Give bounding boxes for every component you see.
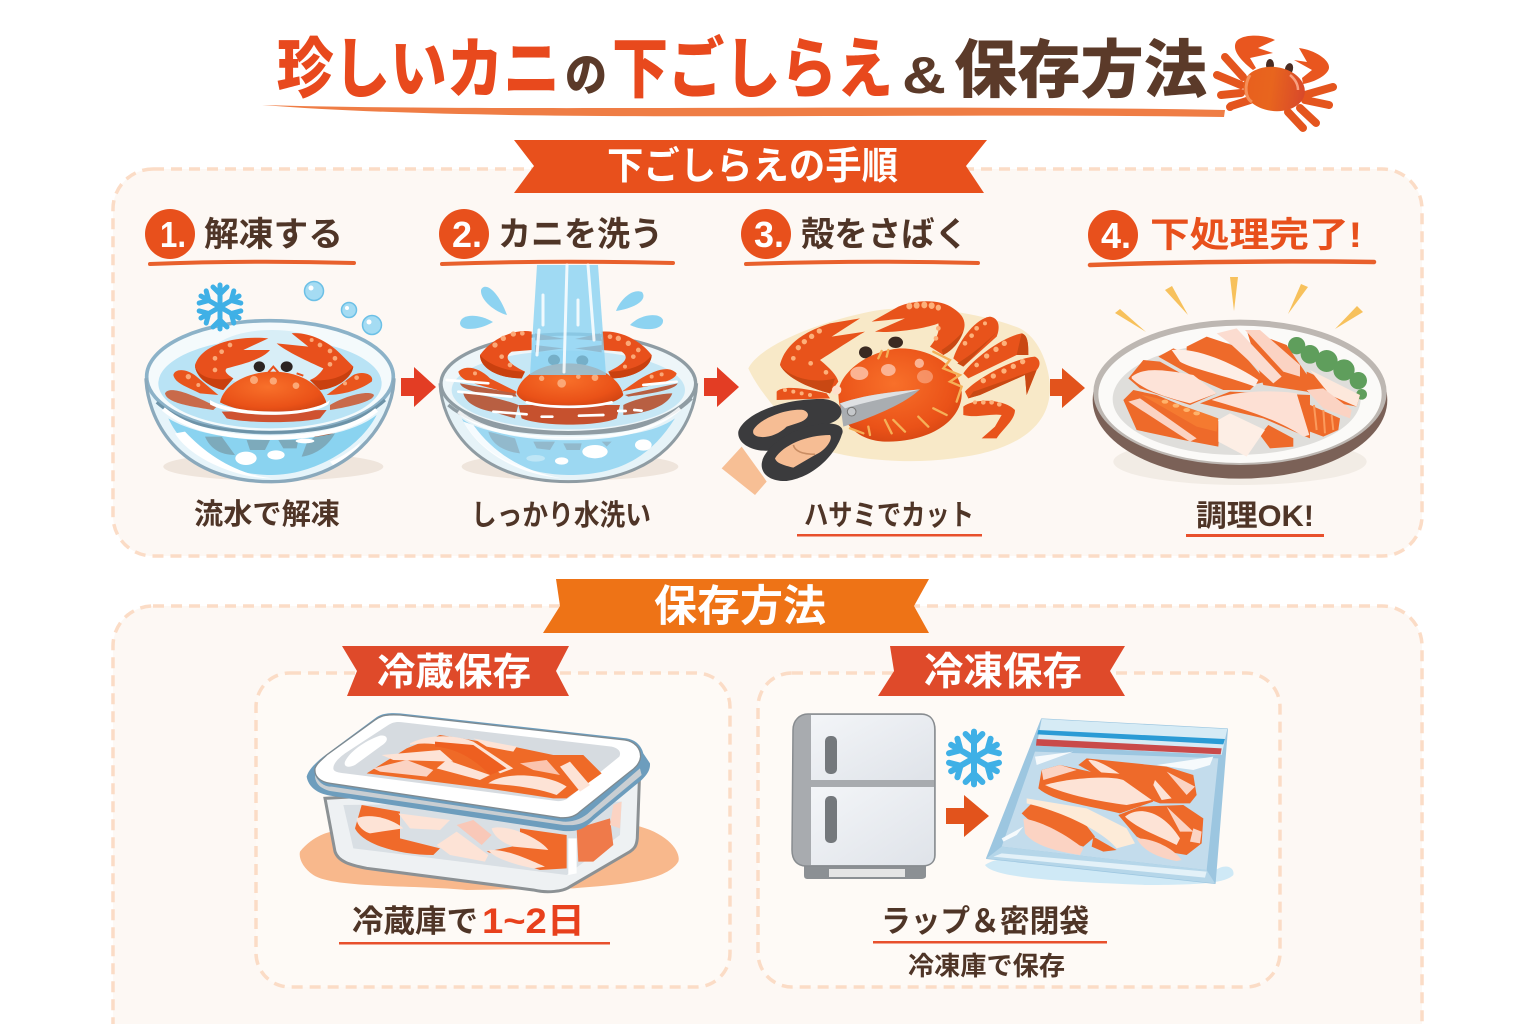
section banner: preparation steps bbox=[514, 140, 987, 193]
icon: snowflake freezer bbox=[947, 732, 1001, 784]
step 4 heading: 下処理完了! bbox=[1150, 216, 1362, 255]
step 3 heading: 殻をさばく bbox=[801, 216, 968, 254]
step 3 heading bbox=[741, 209, 978, 264]
banner: frozen storage bbox=[878, 646, 1125, 696]
step 3 heading: 3. bbox=[754, 214, 784, 255]
section banner: preparation steps: 下ごしらえの手順 bbox=[607, 146, 898, 188]
caption: refrigerator 1 to 2 days: 冷蔵庫で bbox=[352, 904, 478, 939]
banner: refrigerated storage bbox=[342, 646, 569, 696]
caption: refrigerator 1 to 2 days: 1~2日 bbox=[482, 902, 585, 941]
icon: sparkle rays bbox=[1115, 277, 1363, 332]
caption: refrigerator 1 to 2 days bbox=[339, 902, 610, 944]
icon: snowflake bbox=[197, 285, 243, 329]
icon: refrigerator bbox=[792, 714, 935, 879]
illustration: crab cut with scissors bbox=[722, 301, 1050, 495]
banner: frozen storage: 冷凍保存 bbox=[924, 651, 1082, 694]
illustration: freezer bag with crab bbox=[985, 719, 1234, 885]
arrow: step 1 to step 2 bbox=[401, 367, 436, 407]
caption: wrap and sealed bag: ラップ＆密閉袋 bbox=[881, 904, 1089, 939]
illustration: plate of prepared crab bbox=[1093, 320, 1387, 485]
caption: step 3: ハサミでカット bbox=[804, 500, 974, 532]
step 4 heading bbox=[1088, 210, 1374, 265]
caption: keep in freezer: 冷凍庫で保存 bbox=[908, 951, 1065, 981]
icon: title crab bbox=[1217, 36, 1333, 128]
panel: frozen storage bbox=[758, 673, 1280, 987]
panel: storage methods bbox=[113, 606, 1422, 1024]
illustration: crab thawing in bowl bbox=[146, 321, 394, 482]
arrow: step 3 to step 4 bbox=[1050, 368, 1085, 408]
section banner: storage methods bbox=[543, 579, 929, 633]
arrow: freezer to bag bbox=[946, 795, 989, 837]
title bbox=[277, 32, 1207, 106]
section banner: storage methods: 保存方法 bbox=[654, 583, 826, 631]
caption: step 4: 調理OK! bbox=[1196, 500, 1314, 533]
illustration: crab washed in bowl bbox=[440, 331, 697, 482]
step 1 heading bbox=[145, 209, 354, 264]
panel: refrigerated storage bbox=[256, 673, 730, 987]
arrow: step 2 to step 3 bbox=[704, 367, 739, 407]
illustration: refrigerated container bbox=[300, 713, 679, 892]
title: 下ごしらえ bbox=[612, 32, 893, 106]
caption: step 2: しっかり水洗い bbox=[471, 499, 651, 532]
step 2 heading: カニを洗う bbox=[498, 216, 663, 254]
title: 保存方法 bbox=[954, 36, 1207, 106]
step 4 heading: 4. bbox=[1101, 215, 1131, 256]
title: & bbox=[902, 47, 946, 105]
icon: water stream bbox=[530, 265, 606, 375]
step 1 heading: 1. bbox=[160, 214, 186, 255]
icon: water bubbles bbox=[304, 282, 382, 334]
title: の bbox=[565, 49, 607, 101]
banner: refrigerated storage: 冷蔵保存 bbox=[377, 652, 531, 694]
step 2 heading: 2. bbox=[452, 214, 482, 255]
step 2 heading bbox=[439, 209, 673, 264]
icon: water splashes bbox=[460, 287, 663, 329]
title: 珍しいカニ bbox=[277, 32, 560, 106]
title underline swoosh bbox=[262, 105, 1225, 117]
step 1 heading: 解凍する bbox=[204, 216, 343, 254]
panel: preparation steps bbox=[113, 169, 1422, 556]
caption: step 1: 流水で解凍 bbox=[194, 498, 340, 531]
